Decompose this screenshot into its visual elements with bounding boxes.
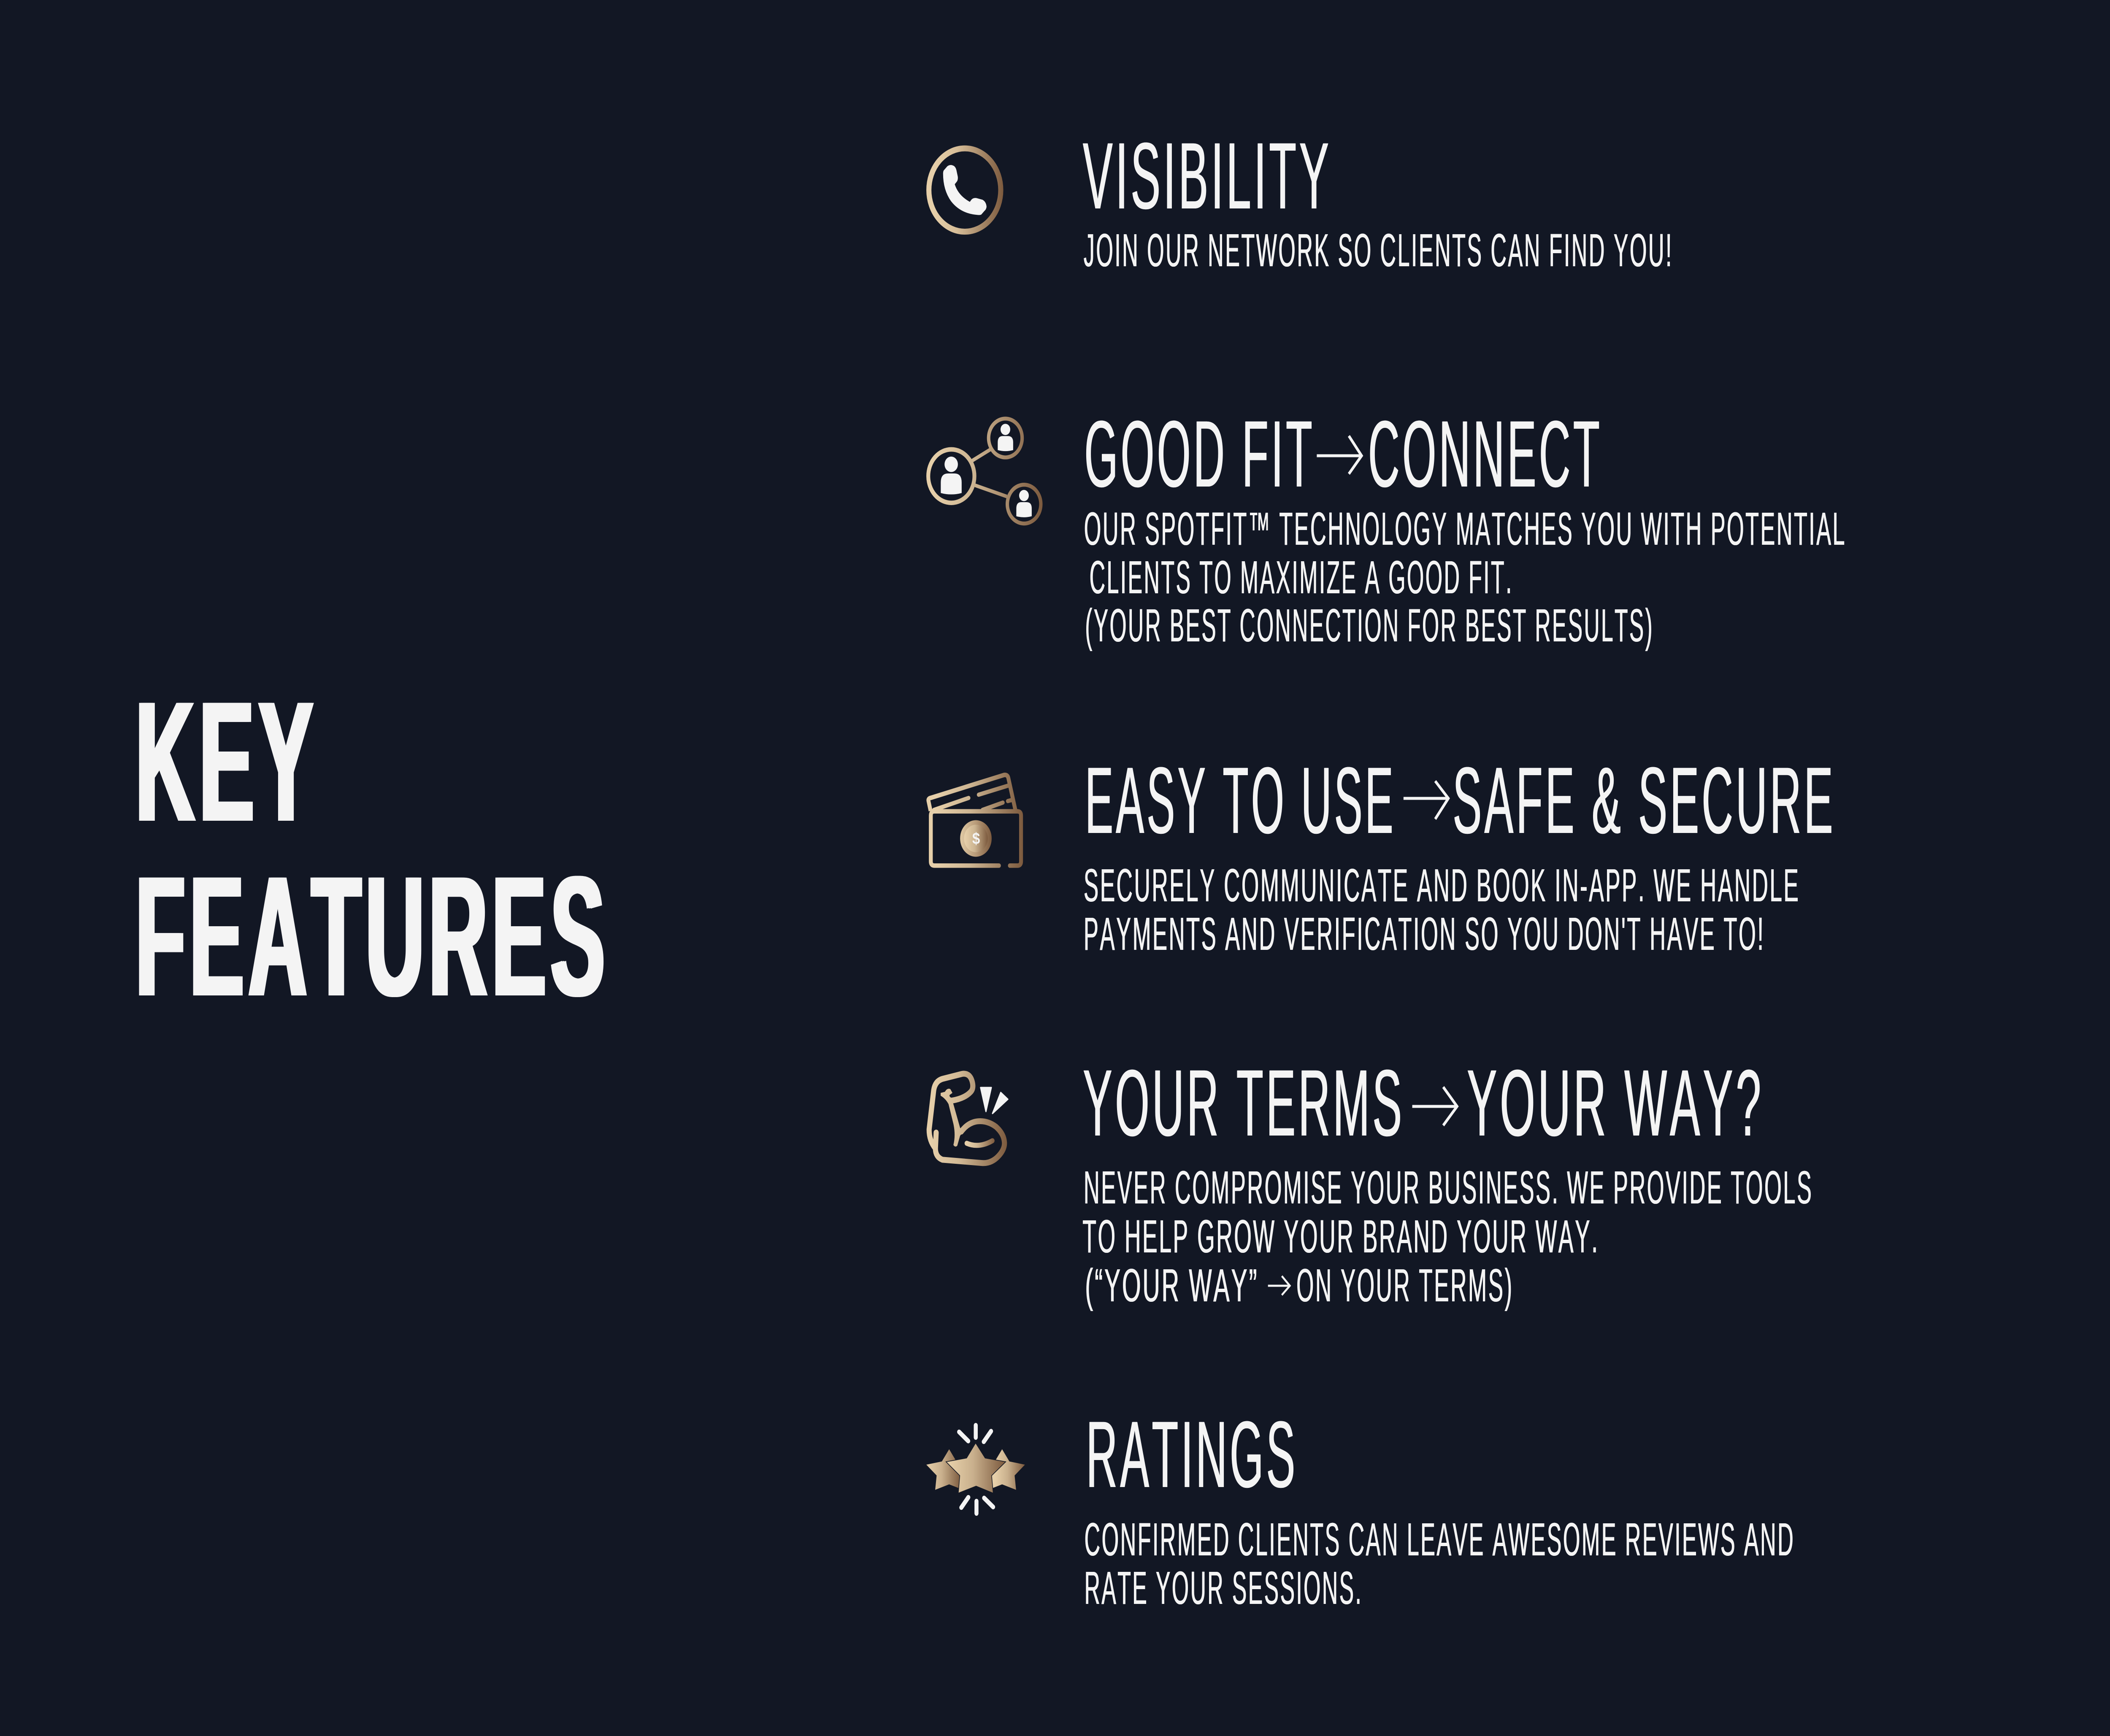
description: your terms your way: (“YOUR WAY” xyxy=(1085,1259,1258,1311)
title: key features xyxy=(135,666,609,1032)
description: your terms your way xyxy=(1082,1161,1813,1311)
arrow xyxy=(1412,1087,1457,1125)
icon: cash and card: $ xyxy=(972,830,980,848)
icon: three stars with sparkles xyxy=(926,1425,1025,1514)
feature: your terms your way xyxy=(929,1051,1813,1311)
title: key features: FEATURES xyxy=(135,841,609,1032)
heading: visibility: VISIBILITY xyxy=(1083,124,1332,229)
description: easy to use safe and secure xyxy=(1084,859,1800,960)
icon: cash and card xyxy=(928,775,1021,865)
feature: good fit connect xyxy=(928,402,1846,652)
title: key features: KEY xyxy=(135,666,318,857)
arrow xyxy=(1404,781,1448,819)
description: ratings xyxy=(1085,1513,1795,1614)
feature: easy to use safe and secure xyxy=(928,748,1836,960)
description: good fit connect xyxy=(1084,503,1846,652)
arrow xyxy=(1317,436,1362,474)
icon: connected people network xyxy=(928,419,1041,524)
description: good fit connect: (YOUR BEST CONNECTION FOR BEST RESULTS) xyxy=(1085,599,1654,652)
icon: flexed muscle arm xyxy=(929,1074,1008,1163)
feature: visibility xyxy=(929,124,1673,276)
small arrow xyxy=(1268,1276,1290,1295)
feature: ratings xyxy=(926,1402,1795,1614)
icon: phone in circle xyxy=(929,149,1001,232)
heading: easy to use safe and secure: EASY TO USE xyxy=(1085,748,1396,853)
heading: your terms your way: YOUR WAY? xyxy=(1467,1051,1764,1156)
heading: your terms your way: YOUR TERMS xyxy=(1083,1051,1404,1156)
heading: good fit connect: CONNECT xyxy=(1368,402,1602,507)
heading: ratings: RATINGS xyxy=(1086,1402,1298,1507)
heading: good fit connect: GOOD FIT xyxy=(1085,402,1315,507)
description: good fit connect: CLIENTS TO MAXIMIZE A GOOD FIT. xyxy=(1090,551,1513,603)
description: your terms your way: ON YOUR TERMS) xyxy=(1296,1259,1514,1311)
description: ratings: RATE YOUR SESSIONS. xyxy=(1085,1562,1363,1614)
description: your terms your way: TO HELP GROW YOUR BRAND YOUR WAY. xyxy=(1082,1210,1599,1263)
